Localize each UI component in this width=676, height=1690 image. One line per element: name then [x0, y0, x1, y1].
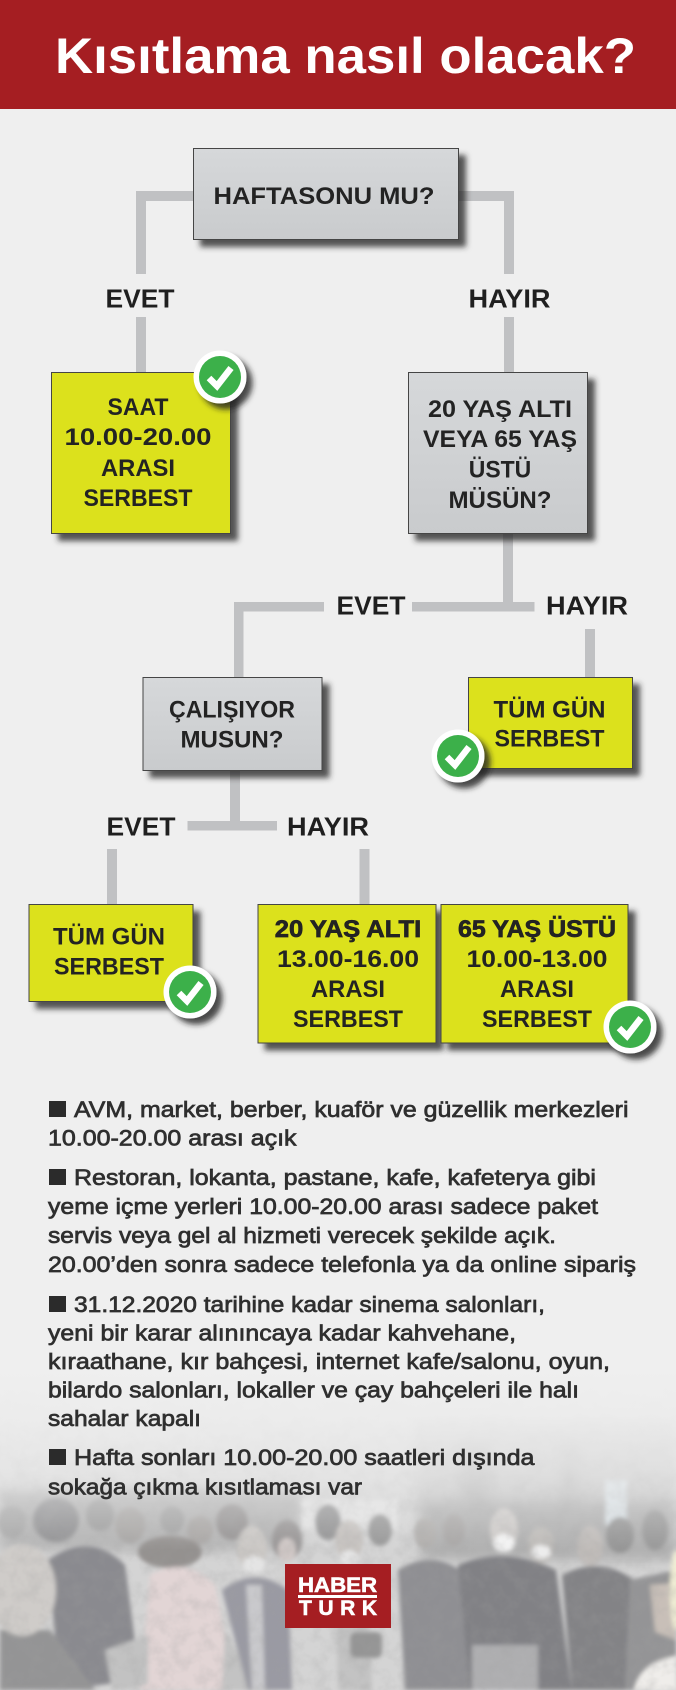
label: Evet (third branch): EVET — [106, 812, 176, 842]
connectors — [107, 191, 595, 904]
background photo: crowd — [0, 1370, 676, 1690]
label: Hayır (third branch): HAYIR — [287, 812, 369, 842]
logo: Habertürk: HABER — [298, 1574, 377, 1597]
centre people — [335, 1568, 372, 1690]
result box: 65 yaş üstü 10.00-13.00: 10.00-13.00 — [466, 946, 608, 973]
result box: Tüm gün serbest (left): TÜM GÜN — [53, 924, 165, 950]
text block: closed venues: sahalar kapalı — [48, 1406, 201, 1431]
question box: Haftasonu mu? — [194, 148, 458, 240]
text block: closed venues: yeni bir karar alınıncaya kadar kahvehane, — [48, 1320, 516, 1346]
result box: Saat 10.00-20.00 arası serbest: 10.00-20.00 — [64, 424, 212, 451]
result box: 20 yaş altı 13.00-16.00: ARASI — [311, 976, 385, 1003]
text block: closed venues: kıraathane, kır bahçesi, internet kafe/salonu, oyun, — [48, 1349, 610, 1374]
text block: restaurant rules: servis veya gel al hizmeti verecek şekilde açık. — [48, 1223, 556, 1248]
result box: Saat 10.00-20.00 arası serbest — [52, 372, 230, 534]
text block: closed venues — [48, 1292, 610, 1431]
question box: 20 yaş altı veya 65 yaş üstü müsün? — [408, 372, 588, 534]
result box: 20 yaş altı 13.00-16.00: 20 YAŞ ALTI — [275, 916, 421, 943]
background head row — [302, 1500, 397, 1530]
label: Evet (first branch): EVET — [106, 284, 175, 314]
result box: Tüm gün serbest (left) — [29, 904, 193, 1002]
result box: Tüm gün serbest (right) — [468, 678, 632, 768]
text block: restaurant rules — [48, 1165, 636, 1277]
text block: weekend curfew: Hafta sonları 10.00-20.00 saatleri dışında — [74, 1445, 535, 1470]
result box: Saat 10.00-20.00 arası serbest: SAAT — [108, 394, 169, 421]
question box: Haftasonu mu?: HAFTASONU MU? — [214, 183, 434, 210]
title: Kısıtlama nasıl olacak? — [55, 28, 636, 84]
result box: 65 yaş üstü 10.00-13.00: ARASI — [500, 976, 574, 1003]
result box: Tüm gün serbest (right): SERBEST — [494, 726, 605, 752]
label: Hayır (first branch): HAYIR — [468, 284, 551, 314]
question box: Çalışıyor musun? — [143, 678, 322, 770]
question box: 20 yaş altı veya 65 yaş üstü müsün?: 20 YAŞ ALTI — [428, 396, 572, 423]
question box: 20 yaş altı veya 65 yaş üstü müsün?: ÜSTÜ — [469, 456, 531, 484]
text block: shopping rules: 10.00-20.00 arası açık — [48, 1126, 298, 1150]
icon: check badge 3 — [164, 966, 216, 1018]
question box: Çalışıyor musun?: MUSUN? — [180, 726, 284, 754]
result box: 20 yaş altı 13.00-16.00 — [258, 904, 436, 1043]
question box: 20 yaş altı veya 65 yaş üstü müsün?: MÜSÜN? — [448, 487, 552, 514]
result box: Saat 10.00-20.00 arası serbest: SERBEST — [84, 485, 193, 512]
text block: restaurant rules: Restoran, lokanta, pastane, kafe, kafeterya gibi — [74, 1165, 596, 1190]
result box: 65 yaş üstü 10.00-13.00: 65 YAŞ ÜSTÜ — [458, 916, 616, 943]
result box: 20 yaş altı 13.00-16.00: 13.00-16.00 — [277, 946, 419, 973]
text block: restaurant rules: yeme içme yerleri 10.00-20.00 arası sadece paket — [48, 1194, 598, 1219]
result box: Tüm gün serbest (right): TÜM GÜN — [494, 696, 606, 724]
right people — [398, 1560, 470, 1690]
photo texture — [0, 1370, 676, 1690]
text block: closed venues: bilardo salonları, lokaller ve çay bahçeleri ile halı — [48, 1378, 579, 1402]
logo: Habertürk: TURK — [299, 1597, 377, 1620]
result box: Saat 10.00-20.00 arası serbest: ARASI — [101, 455, 175, 482]
question box: 20 yaş altı veya 65 yaş üstü müsün?: VEYA 65 YAŞ — [423, 426, 577, 453]
label: Evet (second branch): EVET — [336, 590, 406, 620]
text block: weekend curfew: sokağa çıkma kısıtlaması var — [48, 1474, 362, 1500]
title banner — [0, 0, 676, 109]
result box: Tüm gün serbest (left): SERBEST — [54, 954, 164, 980]
foreground left — [48, 1546, 140, 1690]
label: Hayır (second branch): HAYIR — [546, 590, 628, 620]
logo: Habertürk — [285, 1564, 391, 1628]
text block: shopping rules — [48, 1097, 628, 1150]
result box: 65 yaş üstü 10.00-13.00: SERBEST — [482, 1006, 592, 1033]
text block: closed venues: 31.12.2020 tarihine kadar sinema salonları, — [74, 1292, 545, 1317]
text block: restaurant rules: 20.00’den sonra sadece telefonla ya da online sipariş — [48, 1252, 636, 1277]
question box: Çalışıyor musun?: ÇALIŞIYOR — [169, 696, 295, 724]
text block: shopping rules: AVM, market, berber, kuaför ve güzellik merkezleri — [74, 1097, 628, 1122]
icon: check badge 2 — [432, 730, 484, 782]
text block: weekend curfew — [48, 1445, 535, 1500]
result box: 65 yaş üstü 10.00-13.00 — [441, 904, 628, 1043]
icon: check badge 4 — [604, 1000, 656, 1054]
result box: 20 yaş altı 13.00-16.00: SERBEST — [293, 1006, 403, 1033]
icon: check badge 1 — [194, 350, 246, 404]
